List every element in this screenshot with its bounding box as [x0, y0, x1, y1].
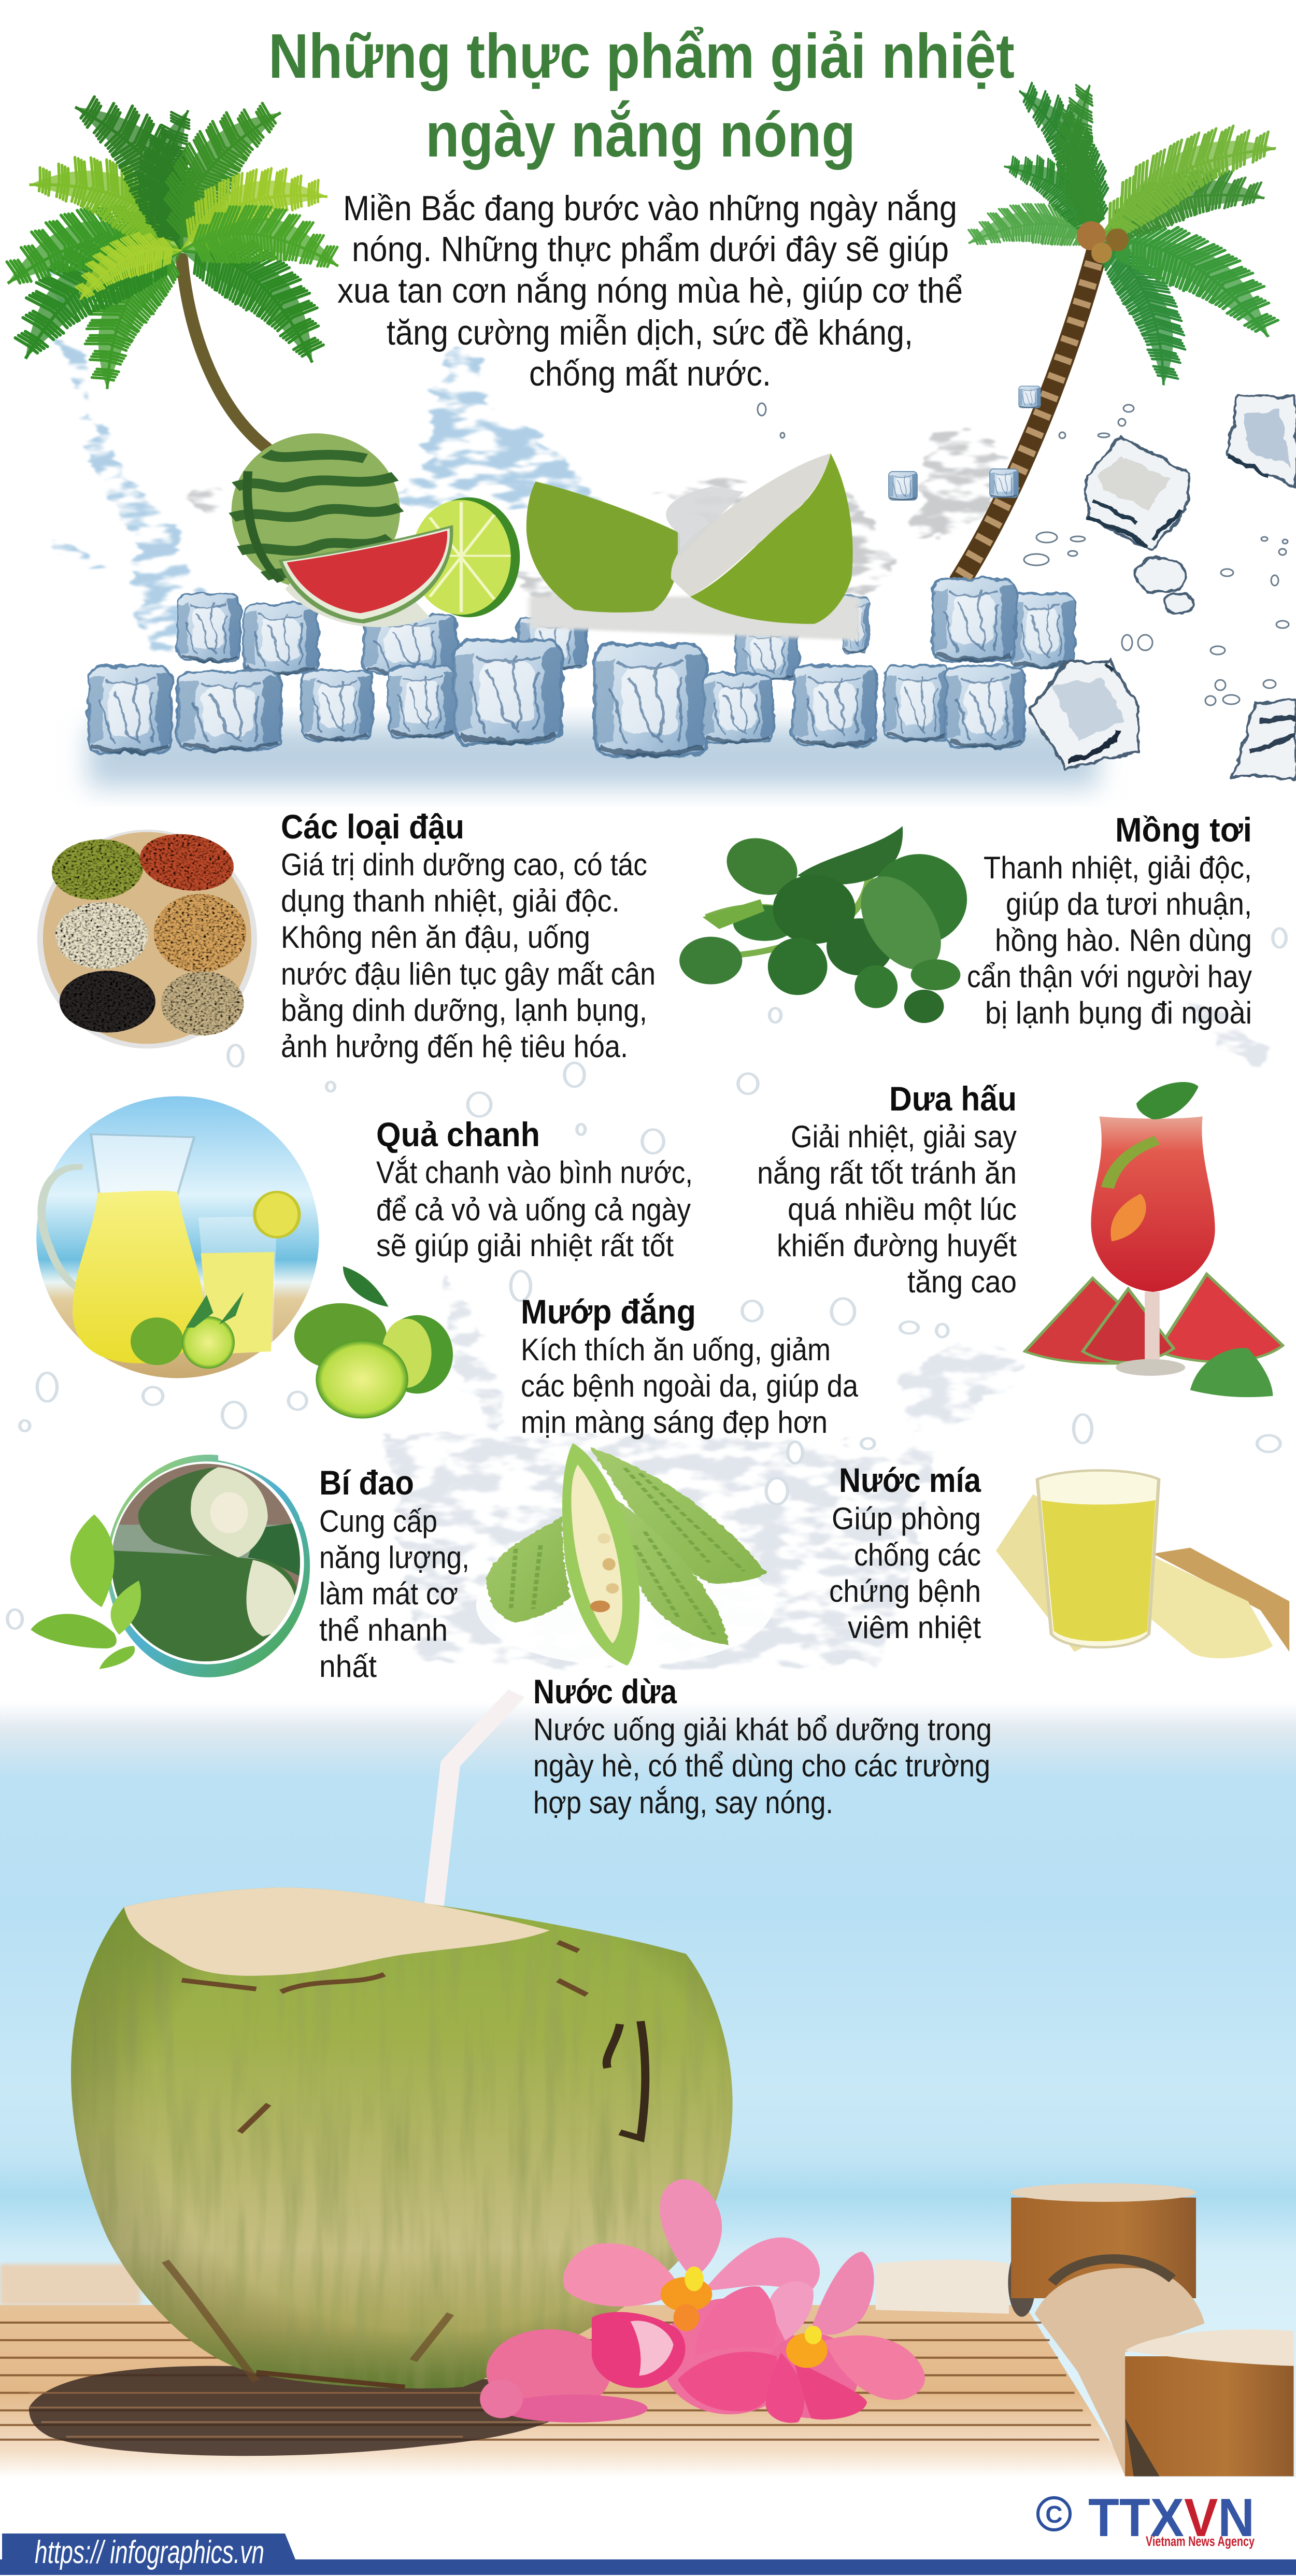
text: mong toi: Thanh nhiệt, giải độc,	[984, 850, 1252, 885]
fresh green coconut	[71, 1887, 733, 2388]
text: nuoc mia: chứng bệnh	[829, 1574, 981, 1609]
drinking straw	[434, 1693, 517, 1907]
image: watermelon cocktail	[1025, 1082, 1283, 1397]
image: sugarcane juice	[996, 1470, 1289, 1658]
image: limes	[294, 1266, 453, 1419]
text: mong toi: hồng hào. Nên dùng	[995, 923, 1252, 958]
text: qua chanh	[376, 1115, 693, 1263]
text: dua hau: khiến đường huyết	[777, 1228, 1017, 1263]
text: nuoc mia: chống các	[854, 1538, 981, 1572]
title: Những thực phẩm giải nhiệt	[268, 21, 1015, 91]
text: dua hau: nắng rất tốt tránh ăn	[757, 1156, 1017, 1190]
text: nuoc dua: Nước uống giải khát bổ dưỡng trong	[533, 1712, 992, 1747]
lime slice	[411, 497, 520, 617]
title	[268, 21, 1015, 170]
logo: TTXVN: Vietnam News Agency	[1146, 2534, 1255, 2549]
text: muop dang: Mướp đắng	[521, 1292, 696, 1331]
text: bi dao: Bí đao	[319, 1463, 414, 1502]
palm tree: left	[0, 76, 348, 448]
text: cac loai dau: Giá trị dinh dưỡng cao, có tác	[281, 847, 647, 882]
text: muop dang	[521, 1292, 859, 1440]
text: mong toi: giúp da tươi nhuận,	[1006, 887, 1252, 921]
text: nuoc mia: Giúp phòng	[832, 1501, 981, 1536]
text: bi dao: thể nhanh	[319, 1613, 448, 1647]
bamboo mat table	[0, 2264, 1132, 2478]
text: mong toi: Mồng tơi	[1115, 810, 1252, 849]
coconut shadow	[29, 2366, 581, 2456]
footer bar with url	[0, 2534, 1296, 2575]
text: nuoc mia: viêm nhiệt	[848, 1610, 981, 1645]
text: qua chanh: sẽ giúp giải nhiệt rất tốt	[376, 1228, 674, 1263]
text: bi dao: làm mát cơ	[319, 1576, 458, 1611]
text: dua hau: quá nhiều một lúc	[788, 1192, 1017, 1227]
text: nuoc mia	[829, 1461, 981, 1645]
logo: TTXVN: TTXVN	[1088, 2488, 1255, 2548]
text: bi dao: Cung cấp	[319, 1504, 437, 1539]
image: winter melon in circular frame	[31, 1444, 322, 1677]
intro paragraph: xua tan cơn nắng nóng mùa hè, giúp cơ thể	[337, 271, 963, 310]
green coconut halves	[526, 453, 860, 641]
text: cac loai dau: ảnh hưởng đến hệ tiêu hóa.	[281, 1029, 628, 1064]
text: dua hau: tăng cao	[907, 1264, 1017, 1299]
text: nuoc dua	[533, 1672, 992, 1820]
ice cube pile	[88, 579, 1099, 788]
text: qua chanh: Quả chanh	[376, 1115, 540, 1154]
intro paragraph: chống mất nước.	[529, 354, 771, 393]
splash: water behind intro	[46, 251, 603, 653]
image: malabar spinach	[679, 826, 967, 1023]
text: muop dang: Kích thích ăn uống, giảm	[521, 1332, 831, 1367]
text: dua hau	[757, 1079, 1017, 1299]
watermelon slice	[279, 525, 453, 627]
small blue cubes on palm trunk	[889, 386, 1041, 500]
text: cac loai dau: dụng thanh nhiệt, giải độc.	[281, 884, 620, 918]
text: nuoc dua: hợp say nắng, say nóng.	[533, 1785, 833, 1820]
image: bitter melons	[476, 1443, 774, 1666]
footer bar with url: https:// infographics.vn	[35, 2535, 264, 2570]
logo: TTXVN: C	[1045, 2501, 1063, 2528]
intro paragraph: nóng. Những thực phẩm dưới đây sẽ giúp	[352, 230, 949, 269]
text: bi dao: năng lượng,	[319, 1540, 469, 1575]
text: cac loai dau: bằng dinh dưỡng, lạnh bụng,	[281, 993, 647, 1028]
text: mong toi: bị lạnh bụng đi ngoài	[985, 995, 1252, 1030]
text: cac loai dau: nước đậu liên tục gây mất cân	[281, 957, 656, 991]
text: dua hau: Giải nhiệt, giải say	[791, 1119, 1017, 1154]
text: mong toi	[967, 810, 1252, 1030]
text: mong toi: cẩn thận với người hay	[967, 959, 1252, 994]
water drops and splashes: middle section	[7, 929, 1286, 1664]
pink plumeria flowers	[480, 2179, 925, 2423]
text: cac loai dau: Các loại đậu	[281, 807, 464, 846]
splash: grey droplet spray near coconuts	[186, 431, 1000, 617]
text: nuoc dua: ngày hè, có thể dùng cho các trường	[533, 1748, 990, 1783]
text: bi dao	[319, 1463, 469, 1684]
title: ngày nắng nóng	[425, 99, 856, 170]
whole watermelon	[232, 433, 400, 589]
text: cac loai dau: Không nên ăn đậu, uống	[281, 920, 590, 955]
text: qua chanh: Vắt chanh vào bình nước,	[376, 1155, 693, 1190]
text: qua chanh: để cả vỏ và uống cả ngày	[376, 1192, 691, 1227]
text: cac loai dau	[281, 807, 656, 1064]
text: bi dao: nhất	[319, 1649, 377, 1684]
text: muop dang: các bệnh ngoài da, giúp da	[521, 1369, 859, 1403]
beach background photo	[0, 1674, 1296, 2477]
intro paragraph	[337, 189, 963, 393]
text: dua hau: Dưa hấu	[889, 1079, 1017, 1118]
table post right: posts, log and rope	[876, 2183, 1293, 2477]
intro paragraph: tăng cường miễn dịch, sức đề kháng,	[387, 313, 913, 352]
intro paragraph: Miền Bắc đang bước vào những ngày nắng	[343, 189, 957, 228]
text: muop dang: mịn màng sáng đẹp hơn	[521, 1405, 828, 1440]
image: lemonade jug and glass	[36, 1096, 319, 1378]
palm tree: right	[959, 71, 1294, 583]
small water droplets: top right	[758, 403, 1289, 705]
ice cubes: glassy crystals around the right palm	[1030, 394, 1296, 777]
text: nuoc mia: Nước mía	[839, 1461, 981, 1499]
image: bowls of beans	[37, 825, 257, 1048]
text: nuoc dua: Nước dừa	[533, 1672, 677, 1711]
